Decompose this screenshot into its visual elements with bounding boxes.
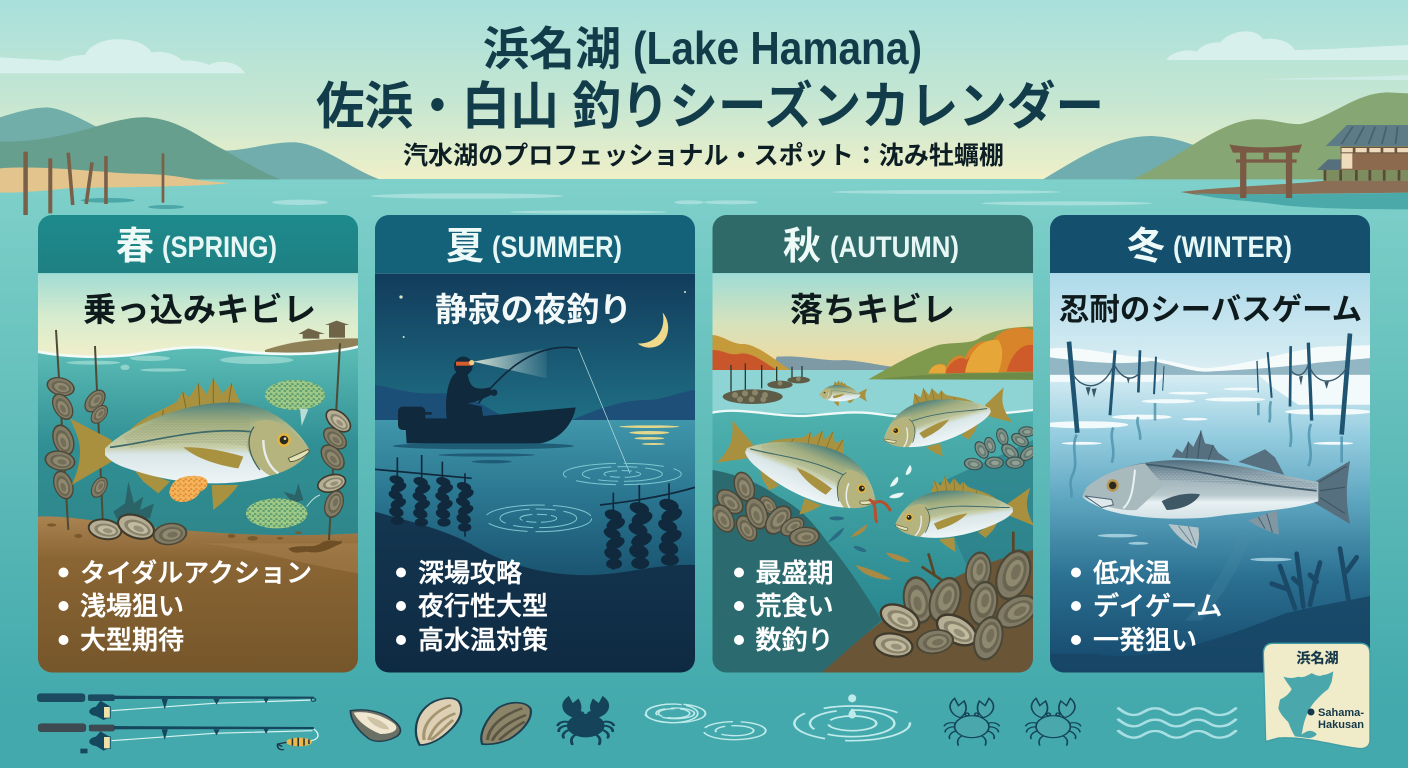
winter heading: 忍耐のシーバスゲーム [1059, 293, 1362, 327]
icon: water drop ripple [794, 694, 910, 741]
bottom icons: ripples, crabs, waves [645, 694, 1236, 746]
location name [1318, 707, 1364, 731]
autumn bullet list: 数釣り [756, 625, 834, 655]
spring bullet list: 大型期待 [80, 625, 184, 655]
background sky [0, 0, 1408, 180]
spring heading: 乗っ込みキビレ [83, 291, 316, 328]
icon: dark oyster shell [481, 703, 531, 744]
left landscape: clouds, hills, sand and posts [0, 39, 704, 215]
icon: waves [1119, 708, 1236, 738]
summer bullet list: 深場攻略 [418, 558, 522, 588]
summer header: (SUMMER) [492, 231, 622, 264]
winter scene: frosted lake, posts, sea bass [1042, 273, 1372, 673]
title [316, 22, 1104, 135]
icon: open oyster [350, 710, 400, 741]
locator map inset [1263, 643, 1370, 749]
autumn bullet list: 荒食い [756, 591, 834, 621]
autumn header: (AUTUMN) [830, 231, 959, 264]
winter bullet list: デイゲーム [1093, 591, 1222, 621]
title: (Lake Hamana) [633, 22, 922, 74]
winter header: 冬 [1127, 226, 1165, 268]
autumn bullet list: 最盛期 [756, 558, 834, 588]
spring header [38, 215, 358, 273]
bottom icons: rods, oyster shells, crab [37, 693, 698, 753]
autumn heading: 落ちキビレ [790, 291, 955, 328]
autumn header: 秋 [783, 226, 821, 268]
spring scene: mudflat, water, fish, oysters [37, 273, 358, 673]
autumn scene: autumn hills, feeding fish, oyster beds [707, 273, 1044, 673]
summer header: 夏 [446, 226, 484, 268]
winter bullet list [1071, 558, 1222, 655]
icon: small ripples [645, 704, 766, 740]
right landscape: clouds, hills, torii gate and lakeside building [704, 31, 1408, 209]
winter bullet list: 一発狙い [1093, 625, 1197, 655]
summer header [375, 215, 695, 273]
winter header [1050, 215, 1370, 273]
icon: crab [558, 698, 614, 744]
summer bullet list: 夜行性大型 [418, 591, 548, 621]
title: 佐浜・白山 釣りシーズンカレンダー [316, 78, 1104, 135]
summer bullet list: 高水温対策 [418, 625, 548, 655]
title: 浜名湖 [483, 23, 621, 75]
icon: fishing rod [37, 693, 316, 720]
autumn bullet list [734, 558, 834, 655]
subtitle: 汽水湖のプロフェッショナル・スポット：沈み牡蠣棚 [403, 142, 1004, 170]
panel: spring [37, 215, 358, 673]
panel: autumn [707, 215, 1044, 673]
icon: crab outline [1026, 698, 1081, 746]
map label: 浜名湖 [1296, 650, 1338, 666]
map background [1263, 643, 1370, 749]
spring header: (SPRING) [162, 231, 277, 264]
spring bullet list [58, 558, 312, 655]
panel: summer [375, 215, 695, 677]
spring header: 春 [116, 226, 154, 268]
spring bullet list: タイダルアクション [80, 558, 312, 588]
summer heading: 静寂の夜釣り [435, 291, 632, 328]
winter header: (WINTER) [1173, 231, 1292, 264]
icon: crab outline [944, 698, 999, 746]
spring bullet list: 浅場狙い [80, 591, 184, 621]
location marker [1308, 708, 1314, 716]
lake shape [1278, 671, 1333, 738]
location name: Sahama- [1318, 707, 1364, 719]
location name: Hakusan [1318, 719, 1364, 731]
summer scene: night lake, angler in boat, moon, oyster racks [375, 273, 695, 677]
panel: winter [1042, 215, 1372, 673]
winter bullet list: 低水温 [1093, 558, 1171, 588]
summer bullet list [396, 558, 548, 655]
background lake water [0, 179, 1408, 768]
icon: ripple [646, 704, 698, 723]
icon: fishing rod with lure [38, 723, 318, 753]
icon: oyster shell [416, 698, 461, 745]
autumn header [712, 215, 1033, 273]
